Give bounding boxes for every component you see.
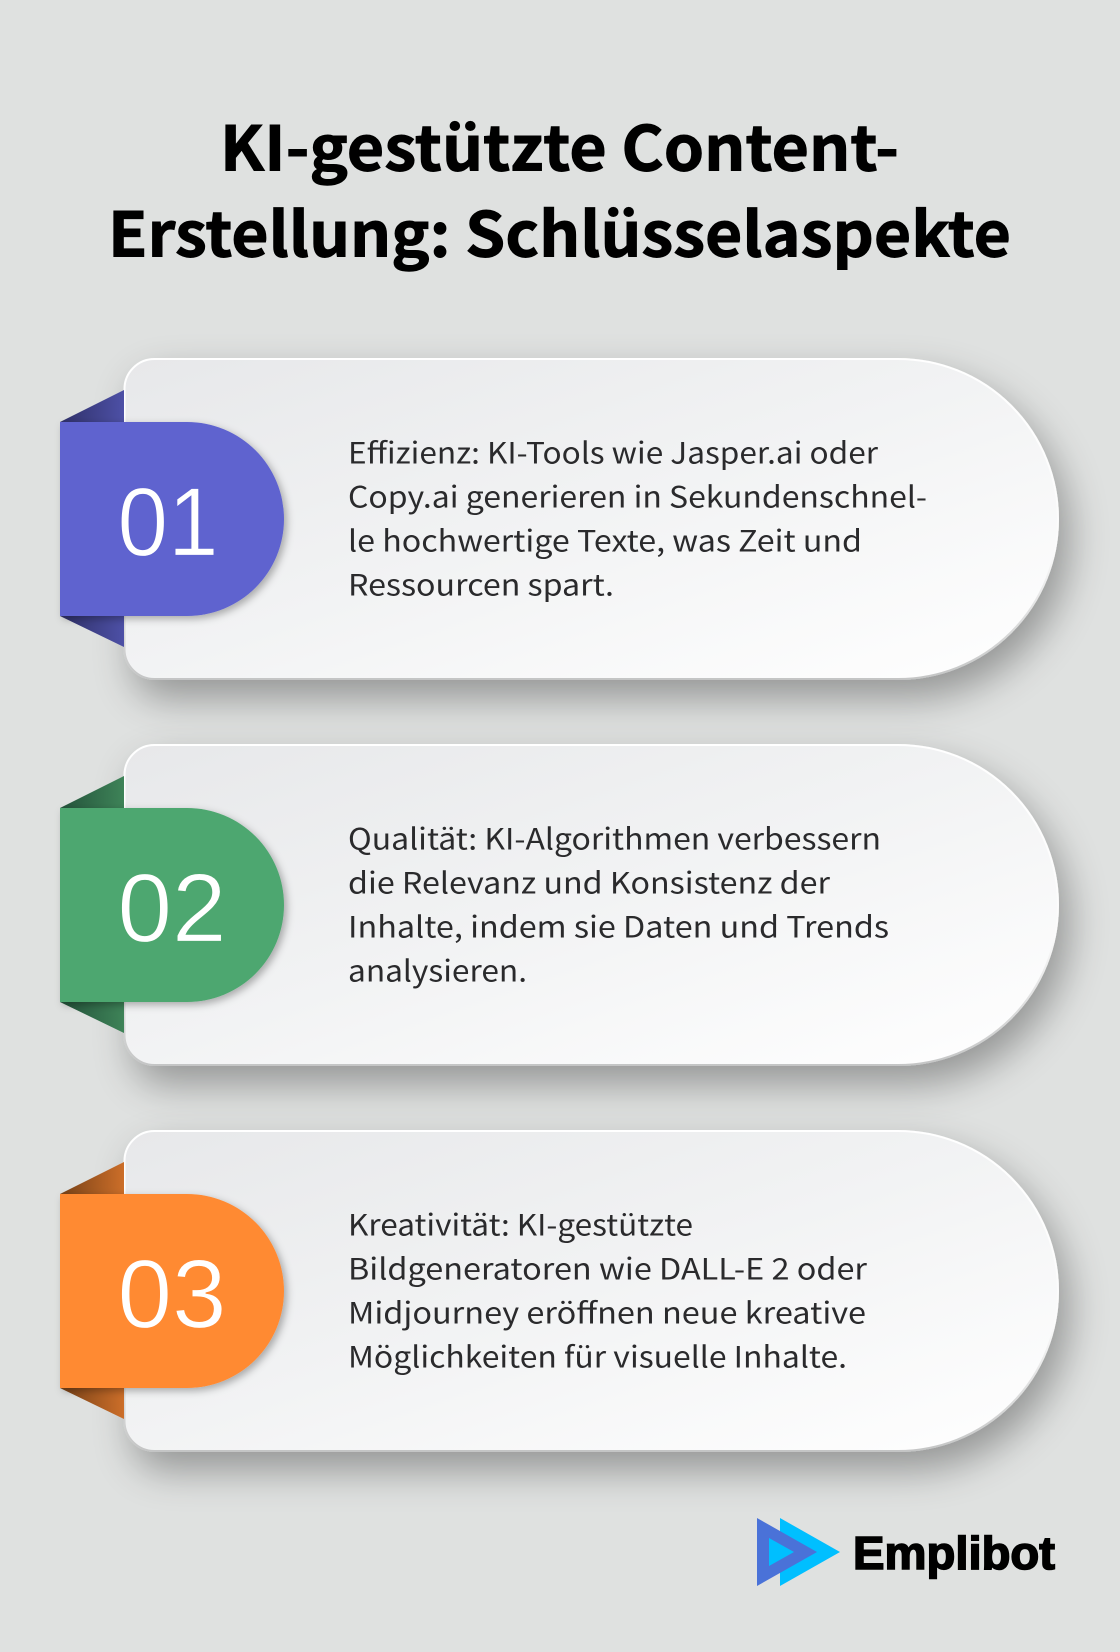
text 01: Copy.ai generieren in Sekundenschnel- [348, 474, 927, 516]
title: Erstellung: Schlüsselaspekte [108, 186, 1011, 274]
wordmark: Emplibot [853, 1527, 1055, 1579]
text 02 [348, 816, 889, 990]
text 02: Inhalte, indem sie Daten und Trends [348, 904, 889, 946]
text 01: le hochwertige Texte, was Zeit und [348, 518, 862, 560]
title: KI-gestützte Content- [220, 100, 899, 188]
fold 03 [60, 1162, 124, 1419]
text 03 [348, 1202, 868, 1376]
text 01: Effizienz: KI-Tools wie Jasper.ai oder [348, 430, 879, 472]
text 03: Bildgeneratoren wie DALL-E 2 oder [348, 1246, 868, 1288]
card 03 [124, 1131, 1058, 1451]
card 02 [124, 745, 1058, 1065]
text 01: Ressourcen spart. [348, 562, 614, 604]
text 02: analysieren. [348, 948, 527, 990]
number 01: 01 [118, 468, 218, 576]
icon: play triangles [757, 1518, 840, 1586]
card 01 [124, 359, 1058, 679]
panel: step 03 Kreativität [60, 1131, 1058, 1451]
text 03: Midjourney eröffnen neue kreative [348, 1290, 866, 1332]
logo: Emplibot [757, 1518, 1055, 1586]
badge 01 [60, 422, 284, 616]
panel: step 01 Effizienz [60, 359, 1058, 679]
text 01 [348, 430, 927, 604]
badge 02 [60, 808, 284, 1002]
text 02: Qualität: KI-Algorithmen verbessern [348, 816, 881, 858]
text 03: Möglichkeiten für visuelle Inhalte. [348, 1334, 847, 1376]
number 03: 03 [118, 1240, 226, 1348]
badge 03 [60, 1194, 284, 1388]
fold 01 [60, 390, 124, 647]
panel: step 02 Qualität [60, 745, 1058, 1065]
text 02: die Relevanz und Konsistenz der [348, 860, 831, 902]
number 02: 02 [118, 854, 226, 962]
title [108, 100, 1011, 274]
fold 02 [60, 776, 124, 1033]
text 03: Kreativität: KI-gestützte [348, 1202, 693, 1244]
